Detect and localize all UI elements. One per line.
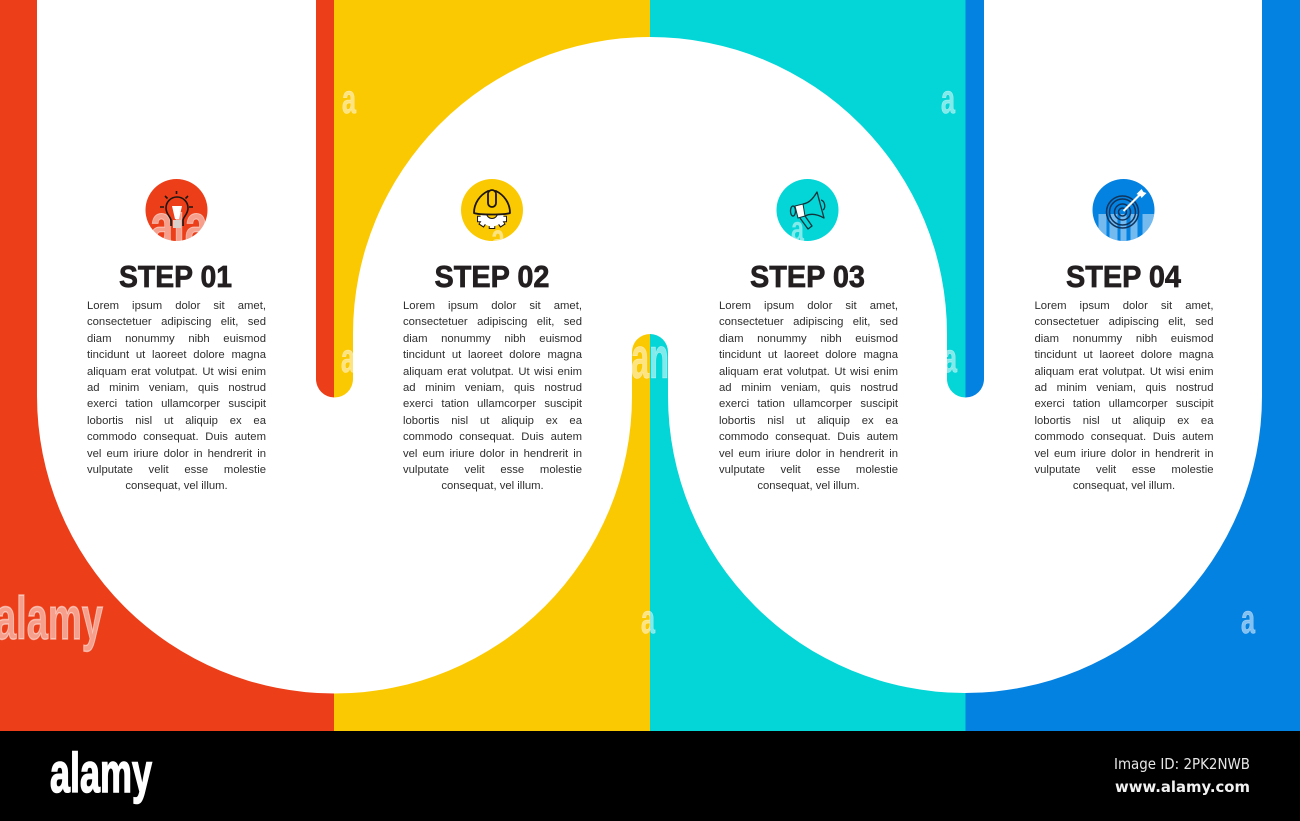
text block: step 04: vel eum iriure dolor in hendrerit in	[1034, 448, 1214, 460]
panel: step 02	[403, 179, 582, 492]
text block: step 01	[87, 300, 266, 492]
text block: step 03: consequat, vel illum.	[757, 480, 860, 492]
background: coloured bands and white curved ribbon: alamy	[0, 585, 103, 652]
website: www.alamy.com	[1115, 778, 1250, 796]
text block: step 01: diam nonummy nibh euismod	[87, 333, 266, 345]
background: coloured bands and white curved ribbon: a	[341, 335, 356, 381]
text block: step 01: commodo consequat. Duis autem	[87, 431, 266, 443]
icon: light bulb: ala	[150, 192, 208, 261]
icon: light bulb	[119, 179, 232, 294]
text block: step 04: exerci tation ullamcorper suscipit	[1034, 398, 1214, 410]
text block: step 02: tincidunt ut laoreet dolore magna	[403, 349, 582, 361]
text block: step 02: Lorem ipsum dolor sit amet,	[403, 300, 582, 312]
text block: step 01: tincidunt ut laoreet dolore magna	[87, 349, 266, 361]
text block: step 01: exerci tation ullamcorper suscipit	[87, 398, 266, 410]
text block: step 03: vel eum iriure dolor in hendrerit in	[719, 448, 898, 460]
text block: step 04: commodo consequat. Duis autem	[1034, 431, 1214, 443]
text block: step 04: consectetuer adipiscing elit, sed	[1034, 316, 1214, 328]
logo: alamy: alamy	[50, 741, 152, 804]
panel: step 03	[719, 179, 898, 492]
text block: step 02: exerci tation ullamcorper suscipit	[403, 398, 582, 410]
text block: step 01: vel eum iriure dolor in hendrerit in	[87, 448, 266, 460]
text block: step 02: aliquam erat volutpat. Ut wisi enim	[403, 366, 582, 378]
panel: step 04	[1034, 179, 1214, 492]
title: step 04: STEP 04	[1066, 259, 1181, 294]
text block: step 02: vel eum iriure dolor in hendrerit in	[403, 448, 582, 460]
text block: step 03: tincidunt ut laoreet dolore magna	[719, 349, 898, 361]
text block: step 02	[403, 300, 582, 492]
text block: step 01: lobortis nisl ut aliquip ex ea	[87, 415, 266, 427]
title: step 01: STEP 01	[119, 259, 232, 294]
text block: step 03: consectetuer adipiscing elit, sed	[719, 316, 898, 328]
text block: step 04: ad minim veniam, quis nostrud	[1034, 382, 1214, 394]
text block: step 02: consequat, vel illum.	[441, 480, 544, 492]
text block: step 04: lobortis nisl ut aliquip ex ea	[1034, 415, 1214, 427]
text block: step 04: consequat, vel illum.	[1073, 480, 1175, 492]
text block: step 03: exerci tation ullamcorper suscipit	[719, 398, 898, 410]
text block: step 01: vulputate velit esse molestie	[87, 464, 266, 476]
text block: step 02: commodo consequat. Duis autem	[403, 431, 582, 443]
background: coloured bands and white curved ribbon: a	[641, 596, 656, 642]
icon: target with arrow	[1066, 179, 1182, 294]
icon: megaphone	[750, 179, 865, 294]
text block: step 03: aliquam erat volutpat. Ut wisi enim	[719, 366, 898, 378]
background: coloured bands and white curved ribbon: a	[342, 76, 357, 122]
text block: step 01: consequat, vel illum.	[125, 480, 228, 492]
icon: megaphone: a	[791, 208, 805, 249]
text block: step 01: ad minim veniam, quis nostrud	[87, 382, 266, 394]
text block: step 02: vulputate velit esse molestie	[403, 464, 582, 476]
text block: step 03: vulputate velit esse molestie	[719, 464, 898, 476]
text block: step 03: Lorem ipsum dolor sit amet,	[719, 300, 898, 312]
text block: step 03: commodo consequat. Duis autem	[719, 431, 898, 443]
text block: step 04: Lorem ipsum dolor sit amet,	[1034, 300, 1214, 312]
icon: helmet and gear	[434, 179, 550, 294]
text block: step 02: lobortis nisl ut aliquip ex ea	[403, 415, 582, 427]
background: coloured bands and white curved ribbon: a	[943, 335, 958, 381]
text block: step 04: tincidunt ut laoreet dolore magna	[1034, 349, 1214, 361]
text block: step 04	[1034, 300, 1214, 492]
background: coloured bands and white curved ribbon: a	[941, 76, 956, 122]
text block: step 03: diam nonummy nibh euismod	[719, 333, 898, 345]
background: coloured bands and white curved ribbon: a	[1241, 596, 1256, 642]
text block: step 01: consectetuer adipiscing elit, sed	[87, 316, 266, 328]
text block: step 04: vulputate velit esse molestie	[1034, 464, 1214, 476]
panel: step 01	[87, 179, 266, 492]
text block: step 02: consectetuer adipiscing elit, sed	[403, 316, 582, 328]
icon: helmet and gear: a	[491, 215, 506, 261]
text block: step 02: diam nonummy nibh euismod	[403, 333, 582, 345]
text block: step 03: lobortis nisl ut aliquip ex ea	[719, 415, 898, 427]
title: step 02: STEP 02	[434, 259, 550, 294]
text block: step 03: ad minim veniam, quis nostrud	[719, 382, 898, 394]
text block: step 04: diam nonummy nibh euismod	[1034, 333, 1214, 345]
text block: step 04: aliquam erat volutpat. Ut wisi enim	[1034, 366, 1214, 378]
footer: black stock photo bar	[50, 741, 1250, 804]
text block: step 03	[719, 300, 898, 492]
title: step 03: STEP 03	[750, 259, 865, 294]
text block: step 01: aliquam erat volutpat. Ut wisi enim	[87, 366, 266, 378]
text block: step 01: Lorem ipsum dolor sit amet,	[87, 300, 266, 312]
background: coloured bands and white curved ribbon: an	[631, 326, 669, 391]
image id: Image ID: 2PK2NWB	[1114, 755, 1250, 773]
text block: step 02: ad minim veniam, quis nostrud	[403, 382, 582, 394]
